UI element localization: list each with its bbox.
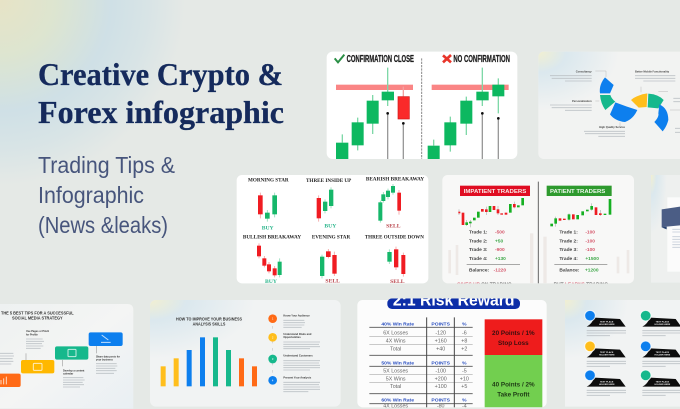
heading: SOCIAL MEDIA STRATEGY (12, 315, 63, 320)
table headers: POINTS (431, 398, 451, 404)
step notes: Use Pages or Pinch (26, 330, 50, 333)
ribbon labels: TEXT PLACE (656, 380, 670, 383)
timeline text (283, 314, 313, 379)
panel: impatient vs patient traders (442, 175, 634, 287)
step notes: your business (96, 359, 113, 362)
table: patient: Trade 2: (559, 238, 578, 244)
ribbons (587, 318, 680, 387)
labels: Better Mobile Functionality (635, 69, 670, 73)
stop loss box: 20 Points / 1% (492, 330, 535, 337)
table rows: +2 (461, 346, 467, 352)
table rows: -120 (435, 331, 446, 337)
heading (1, 310, 74, 320)
timeline text: Understand Risks and (283, 332, 312, 336)
ribbon labels: HOLDER HERE (599, 355, 615, 357)
table rows: +100 (435, 384, 447, 390)
panel: business analysis bar chart (150, 300, 341, 407)
table rows: 6X Losses (383, 331, 408, 337)
circle icons (585, 310, 651, 381)
heading: impatient traders: IMPATIENT TRADERS (464, 189, 527, 195)
table headers: 60% Win Rate (381, 398, 414, 404)
table rows (383, 331, 469, 409)
subtitle: (News &leaks) (38, 212, 168, 238)
table: impatient: -900 (495, 247, 505, 253)
table: impatient: Trade 4: (469, 256, 488, 262)
table: impatient (457, 229, 520, 287)
table: impatient: +50 (495, 238, 504, 244)
labels (572, 69, 670, 129)
table headers: % (462, 398, 467, 404)
candles: patient (550, 199, 611, 227)
table rows: -5 (462, 368, 467, 374)
panel: curved steps infographic (538, 52, 680, 159)
panel: confirmation close chart (327, 52, 517, 159)
table headers: POINTS (431, 322, 451, 328)
take profit box: Take Profit (497, 392, 530, 399)
pattern headings: EVENING STAR (312, 235, 351, 240)
heading (176, 317, 242, 327)
title (38, 56, 284, 130)
take profit box: 40 Points / 2% (492, 382, 535, 389)
title: Creative Crypto & (38, 56, 283, 92)
ribbon labels: TEXT PLACE (656, 351, 670, 354)
panel: candlestick patterns (237, 175, 428, 285)
stop loss box: Stop Loss (498, 340, 529, 347)
table rows: -100 (435, 368, 446, 374)
table: impatient: Balance: (469, 268, 490, 274)
stop loss box (485, 319, 542, 355)
green candles (265, 186, 395, 276)
step icons (1, 335, 111, 384)
table headers: % (462, 322, 467, 328)
staircase steps (0, 332, 123, 387)
table headers: 50% Win Rate (381, 360, 414, 366)
body text (587, 331, 680, 395)
table: impatient: GIVES UP ON TRADING (457, 281, 512, 287)
table: patient: -100 (585, 247, 595, 253)
timeline text: Understand Customers (283, 354, 313, 358)
table: impatient: +130 (495, 256, 506, 262)
table rows: Total (390, 384, 401, 390)
panel: 2:1 risk reward (357, 290, 547, 409)
table grid (369, 317, 473, 407)
panel: social media strategy steps (0, 304, 133, 409)
heading: patient traders (547, 186, 612, 196)
subtitle: Trading Tips & (38, 152, 175, 178)
header banner: 2:1 Risk Reward (393, 290, 514, 309)
ribbon labels: TEXT PLACE (600, 351, 614, 354)
pattern headings: BULLISH BREAKAWAY (243, 235, 302, 240)
timeline text: Opportunities (283, 335, 301, 339)
table rows: 5X Losses (383, 368, 408, 374)
pattern headings: THREE INSIDE UP (306, 179, 351, 184)
red candles (257, 193, 405, 275)
numbered timeline: 2 (272, 335, 274, 339)
table: impatient: Trade 3: (469, 247, 488, 253)
step notes: for Profile (26, 333, 38, 336)
panel: text placeholder cards (565, 300, 680, 407)
table headers: % (462, 360, 467, 366)
buy and sell labels: SELL (386, 224, 401, 230)
table rows: +40 (436, 346, 445, 352)
table: impatient: Trade 1: (469, 229, 488, 235)
heading: HOW TO IMPROVE YOUR BUSINESS (176, 317, 242, 322)
ribbon labels: TEXT PLACE (600, 320, 614, 323)
table rows: +10 (460, 376, 469, 382)
labels: Consultancy (576, 70, 592, 74)
candle wicks (259, 184, 403, 278)
table rows: +160 (435, 339, 447, 345)
table: patient: -100 (585, 238, 595, 244)
pattern headings: BEARISH BREAKAWAY (366, 178, 425, 183)
timeline text: Present Your Analysis (283, 375, 312, 379)
heading: confirmation close: CONFIRMATION CLOSE (347, 54, 414, 65)
buy and sell labels (262, 224, 405, 285)
subtitle: Infographic (38, 182, 144, 208)
ribbon labels: HOLDER HERE (654, 384, 671, 386)
table: patient (554, 229, 608, 287)
pattern headings (243, 178, 425, 240)
pattern headings: MORNING STAR (248, 179, 289, 184)
subtitle (38, 152, 175, 238)
heading: patient traders: PATIENT TRADERS (550, 189, 606, 195)
heading: impatient traders (460, 186, 530, 196)
table headers: POINTS (431, 360, 451, 366)
icon: check mark (335, 55, 344, 62)
heading: THE 5 BEST TIPS FOR A SUCCESSFUL (1, 310, 74, 315)
table headers (381, 322, 467, 404)
buy and sell labels: BUY (262, 225, 274, 231)
table: patient: BUT LEARNS TRADING (554, 281, 608, 287)
ribbon labels: TEXT PLACE (656, 320, 670, 323)
table: impatient: -500 (495, 229, 505, 235)
ribbon labels: TEXT PLACE (600, 380, 614, 383)
ribbon labels: HOLDER HERE (599, 384, 615, 386)
step notes: Share data posts for (96, 356, 120, 359)
title: Forex infographic (38, 94, 284, 130)
table: patient: Trade 3: (559, 247, 578, 253)
labels: High Quality Service (599, 125, 626, 129)
candles: impatient (458, 198, 524, 227)
step notes (26, 330, 120, 375)
table: patient: Trade 1: (559, 229, 578, 235)
table rows: 4X Wins (386, 339, 406, 345)
table: patient: +1500 (585, 256, 599, 262)
ribbon labels: HOLDER HERE (654, 324, 671, 326)
curved segments (600, 77, 668, 131)
table rows: +5 (461, 384, 467, 390)
ribbon labels: HOLDER HERE (599, 324, 615, 326)
table rows: -6 (462, 331, 467, 337)
table: impatient: Trade 2: (469, 238, 488, 244)
numbered timeline (268, 314, 277, 385)
icon: cross mark (443, 55, 451, 62)
numbered timeline: 4 (272, 378, 274, 382)
numbered timeline: 1 (272, 317, 274, 321)
timeline text: Know Your Audience (283, 314, 310, 318)
pattern headings: THREE OUTSIDE DOWN (365, 235, 425, 240)
buy and sell labels: BUY (265, 279, 277, 285)
step notes: Develop a content (63, 369, 85, 372)
buy and sell labels: SELL (325, 279, 340, 285)
table: patient: -100 (585, 229, 595, 235)
step notes: calendar (63, 372, 73, 375)
ribbon labels (599, 320, 671, 386)
table: patient: Balance: (559, 268, 580, 274)
numbered timeline: 3 (272, 357, 274, 361)
table rows: Total (390, 346, 401, 352)
table: patient: Trade 4: (559, 256, 578, 262)
buy and sell labels: BUY (324, 224, 336, 230)
labels: Personalization (572, 99, 592, 103)
faded background chart (448, 233, 629, 283)
heading: ANALYSIS SKILLS (193, 322, 226, 327)
buy and sell labels: SELL (390, 279, 405, 285)
bar chart (161, 337, 257, 386)
take profit box (485, 355, 542, 407)
ribbon labels: HOLDER HERE (654, 355, 671, 357)
table rows: 5X Wins (386, 376, 406, 382)
table headers: 40% Win Rate (381, 322, 414, 328)
table rows: +8 (461, 339, 467, 345)
table: patient: +1200 (585, 268, 599, 274)
heading: no confirmation: NO CONFIRMATION (453, 54, 510, 65)
header banner (387, 298, 520, 309)
panel: ribbon document partly cropped (651, 175, 680, 283)
table: impatient: -1220 (494, 268, 506, 274)
table rows: +200 (435, 376, 447, 382)
